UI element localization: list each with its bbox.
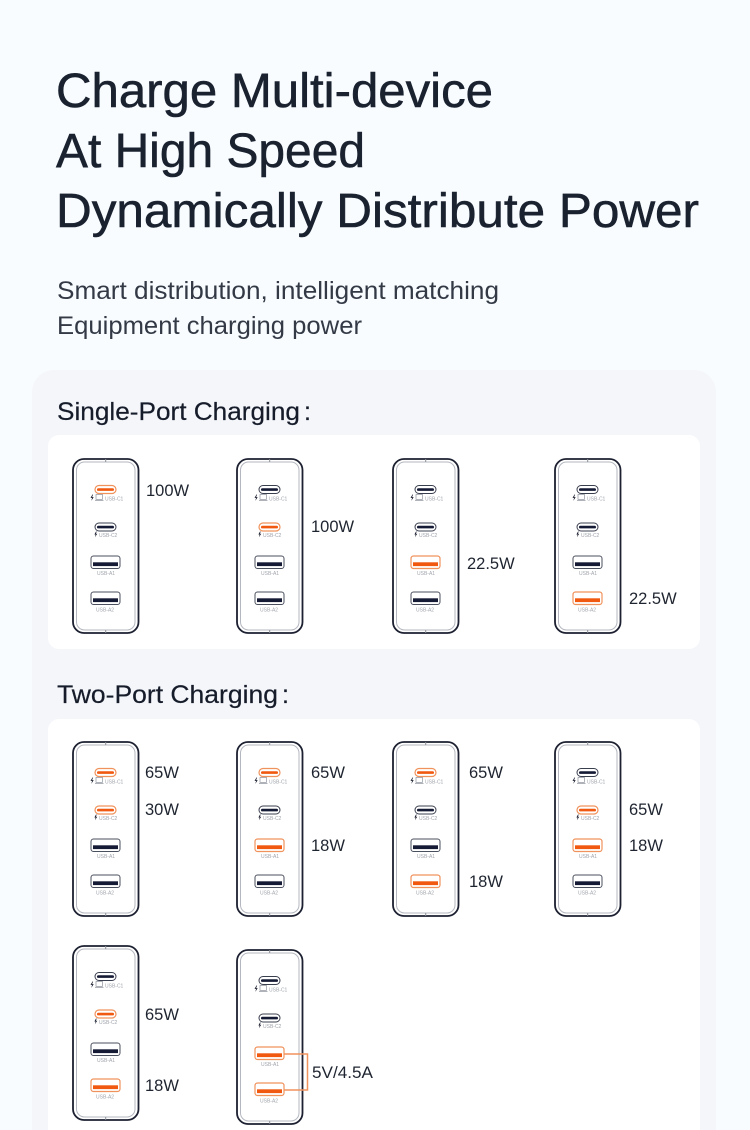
charger: single port USB-C2 (237, 459, 302, 633)
charger: USB-C1 and USB-A1: USB-A1 (261, 854, 279, 860)
label: 100W: 100W (311, 518, 355, 536)
charger: USB-C1 and USB-C2: USB-A2 (96, 890, 114, 896)
title (56, 65, 699, 238)
charger: single port USB-A1: USB-C1 (425, 496, 444, 502)
charger: USB-C1 and USB-C2: USB-C1 (105, 780, 124, 786)
label: 18W: 18W (469, 873, 503, 891)
charger: USB-C2 and USB-A2: USB-A2 (96, 1094, 114, 1100)
charger: single port USB-A1: USB-A1 (417, 571, 435, 577)
charger: single port USB-A2: USB-C2 (581, 533, 600, 539)
charger: single port USB-A1: USB-A2 (416, 608, 434, 614)
charger: USB-C2 and USB-A2: USB-A1 (97, 1058, 115, 1064)
charger: single port USB-C2: USB-A2 (260, 608, 278, 614)
label: 65W: 65W (145, 764, 179, 782)
subtitle: Smart distribution, intelligent matching (57, 277, 499, 305)
charger: USB-C1 and USB-A1 (237, 742, 302, 916)
heading: single-port charging: : (304, 398, 311, 426)
charger: USB-C1 and USB-A2: USB-A1 (417, 854, 435, 860)
label: 65W: 65W (145, 1006, 179, 1024)
title: At High Speed (56, 125, 365, 178)
charger: USB-C1 and USB-A2: USB-A2 (416, 890, 434, 896)
charger: USB-C1 and USB-A1: USB-C2 (263, 816, 282, 822)
charger: USB-C1 and USB-C2 (73, 742, 138, 916)
heading: two-port charging: Two-Port Charging (57, 681, 278, 709)
charger: USB-C2 and USB-A2: USB-C1 (105, 984, 124, 990)
label: 65W: 65W (469, 764, 503, 782)
title: Dynamically Distribute Power (56, 185, 699, 238)
charger: single port USB-A2 (555, 459, 620, 633)
charger: USB-A1 and USB-A2 (237, 950, 302, 1124)
label: 30W: 30W (145, 801, 179, 819)
label: 22.5W: 22.5W (629, 590, 677, 608)
charger: USB-A1 and USB-A2: USB-A1 (261, 1062, 279, 1068)
charger: single port USB-A2: USB-A1 (579, 571, 597, 577)
label: 18W: 18W (311, 837, 345, 855)
charger: single port USB-A1: USB-C2 (419, 533, 438, 539)
charger: USB-C1 and USB-A1: USB-A2 (260, 890, 278, 896)
charger: USB-C1 and USB-A2: USB-C2 (419, 816, 438, 822)
charger: single port USB-C1 (73, 459, 138, 633)
charger: single port USB-C2: USB-C1 (269, 496, 288, 502)
charger: single port USB-C1: USB-A1 (97, 571, 115, 577)
bracket: shared USB-A connector (284, 1054, 308, 1090)
label: 22.5W: 22.5W (467, 555, 515, 573)
charger: single port USB-C1: USB-A2 (96, 608, 114, 614)
subtitle (57, 277, 499, 340)
panel: two-port chargers (48, 719, 700, 1130)
charger: USB-C2 and USB-A1: USB-C2 (581, 816, 600, 822)
charger: USB-A1 and USB-A2: USB-C1 (269, 988, 288, 994)
charger: USB-A1 and USB-A2: USB-C2 (263, 1024, 282, 1030)
charger: USB-C2 and USB-A1: USB-A1 (579, 854, 597, 860)
label: 18W: 18W (629, 837, 663, 855)
charger: single port USB-C1: USB-C1 (105, 496, 124, 502)
charger: single port USB-C2: USB-A1 (261, 571, 279, 577)
title: Charge Multi-device (56, 65, 493, 118)
heading: single-port charging: Single-Port Charging (57, 398, 300, 426)
charger: USB-C1 and USB-C2: USB-C2 (99, 816, 118, 822)
label: 65W: 65W (629, 801, 663, 819)
charger: single port USB-A2: USB-A2 (578, 608, 596, 614)
label: 5V/4.5A: 5V/4.5A (312, 1064, 373, 1082)
charger: USB-A1 and USB-A2: USB-A2 (260, 1098, 278, 1104)
panel: single-port chargers (48, 435, 700, 649)
charger: USB-C1 and USB-A2: USB-C1 (425, 780, 444, 786)
charger: single port USB-C1: USB-C2 (99, 533, 118, 539)
subtitle: Equipment charging power (57, 312, 362, 340)
charger: USB-C2 and USB-A2 (73, 946, 138, 1120)
charger: USB-C2 and USB-A1: USB-C1 (587, 780, 606, 786)
panel: charging modes (32, 370, 716, 1130)
heading: two-port charging: : (282, 681, 289, 709)
charger: single port USB-C2: USB-C2 (263, 533, 282, 539)
charger: USB-C1 and USB-A2 (393, 742, 458, 916)
charger: single port USB-A1 (393, 459, 458, 633)
charger: USB-C1 and USB-C2: USB-A1 (97, 854, 115, 860)
charger: USB-C1 and USB-A1: USB-C1 (269, 780, 288, 786)
charger: single port USB-A2: USB-C1 (587, 496, 606, 502)
label: 65W: 65W (311, 764, 345, 782)
charger: USB-C2 and USB-A1 (555, 742, 620, 916)
label: 18W: 18W (145, 1077, 179, 1095)
charger: USB-C2 and USB-A1: USB-A2 (578, 890, 596, 896)
label: 100W: 100W (146, 482, 190, 500)
charger: USB-C2 and USB-A2: USB-C2 (99, 1020, 118, 1026)
